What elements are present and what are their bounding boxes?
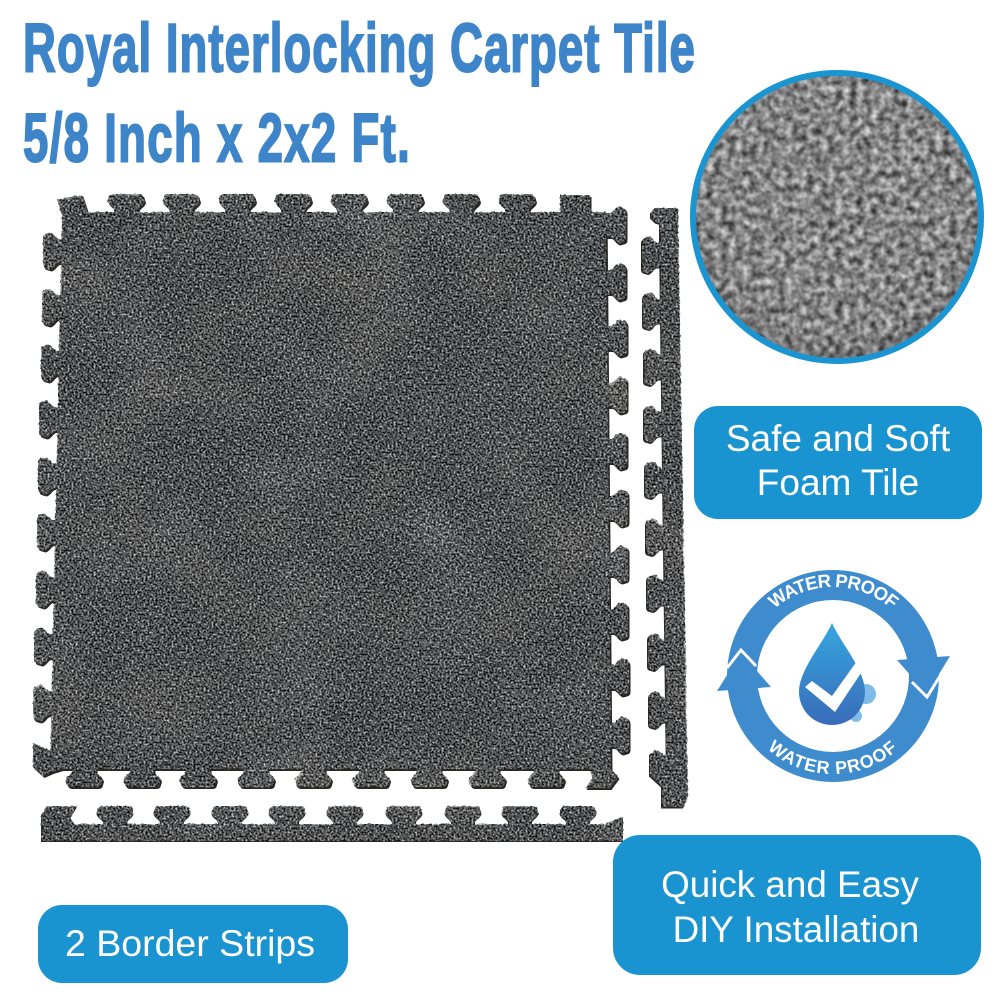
callout: 2 border strips [38, 905, 348, 983]
icon: water proof badge [717, 570, 950, 782]
callout: quick and easy DIY installation: DIY Installation [673, 909, 919, 950]
right border strip [641, 208, 688, 808]
main carpet tile [33, 194, 630, 790]
carpet close-up circle [693, 73, 981, 361]
callout: quick and easy DIY installation [613, 835, 981, 975]
title: Royal Interlocking Carpet Tile [23, 10, 695, 87]
badge text: bottom: WATER PROOF [770, 739, 894, 774]
title: 5/8 Inch x 2x2 Ft. [23, 100, 410, 177]
badge text: top: WATER PROOF [766, 574, 900, 607]
arrow: right [897, 656, 950, 697]
callout: 2 border strips: 2 Border Strips [65, 922, 315, 964]
callout: safe and soft foam tile: Safe and Soft [726, 418, 951, 459]
bottom border strip [41, 806, 623, 842]
callout: safe and soft foam tile [694, 406, 982, 519]
icon: water drop with check [799, 623, 876, 725]
title [23, 10, 695, 177]
callout: safe and soft foam tile: Foam Tile [757, 462, 919, 503]
arrow: left [717, 650, 771, 691]
callout: quick and easy DIY installation: Quick and Easy [661, 864, 919, 905]
